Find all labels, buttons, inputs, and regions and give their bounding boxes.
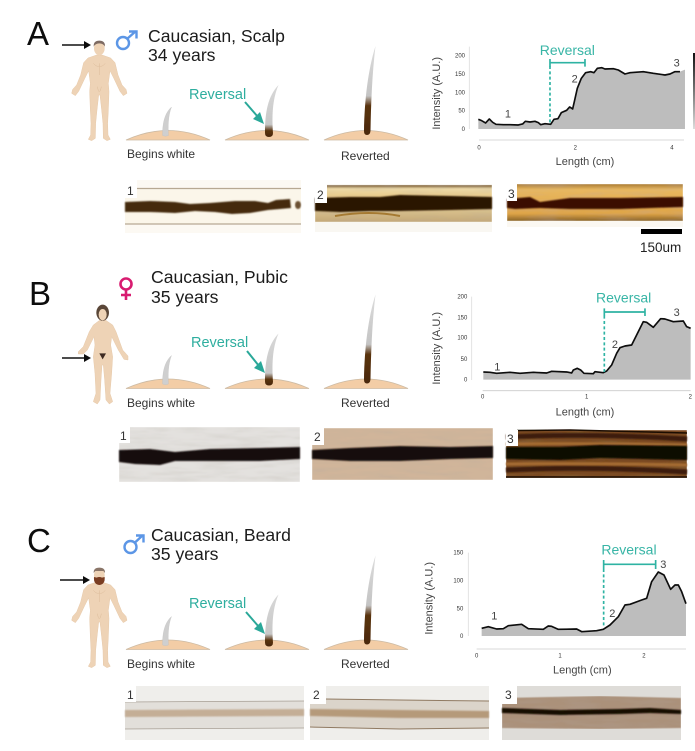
icon: male symbol [117,31,136,49]
label: reverted: Reverted [341,657,390,671]
micrograph A1 [125,180,301,233]
heading: panel letter B: B [29,275,51,312]
arrow: points to beard [60,576,90,584]
chart: intensity profile B: Reversal [596,290,651,306]
micrograph B1: 1 [120,429,127,443]
chart: intensity profile A: 2 [574,146,578,152]
hair stage: reversal [225,85,309,140]
chart: intensity profile B: 100 [457,336,468,342]
label: reversal: Reversal [189,87,246,103]
chart: intensity profile C: 1 [558,654,562,660]
chart: intensity profile B [431,290,693,418]
arrow: reversal point [246,612,265,634]
chart: intensity profile C: 100 [453,579,464,585]
label: begins white: Begins white [127,147,195,161]
panel: C beard [27,522,686,740]
scale bar [640,229,682,255]
chart: intensity profile B: 150 [457,315,468,321]
chart: intensity profile A: 150 [455,72,466,78]
micrograph A2 [315,184,492,232]
chart: intensity profile A [431,42,685,168]
figure: male body with scalp marked [72,41,127,141]
chart: intensity profile B: 1 [494,361,500,373]
chart: intensity profile C [423,542,686,677]
icon: female symbol [120,278,132,300]
icon: male symbol [124,535,144,553]
hair stage: reversal [225,594,309,650]
chart: intensity profile A: 0 [477,146,481,152]
micrograph A1: 1 [127,184,134,198]
chart: intensity profile B: 2 [689,395,693,401]
hair stage: begins white [126,356,210,388]
chart: intensity profile B: 3 [674,307,680,319]
chart: intensity profile A: 50 [458,109,466,115]
text: subject description: Caucasian, Pubic [151,267,288,287]
label: reverted: Reverted [341,396,390,410]
area: intensity curve [483,319,691,380]
text: subject description: Caucasian, Beard [151,525,291,545]
label: reversal: Reversal [191,335,248,351]
heading: panel letter A: A [27,15,49,52]
chart: intensity profile A: 3 [674,57,680,69]
chart: intensity profile C: 0 [460,634,464,640]
area: intensity curve [478,68,685,129]
micrograph A2: 2 [317,188,324,202]
figure: female body with pubic area marked [78,305,128,404]
chart: intensity profile B: 0 [481,395,485,401]
micrograph B2: 2 [314,430,321,444]
chart: intensity profile B: 1 [585,395,589,401]
label: begins white: Begins white [127,396,195,410]
micrograph C1 [125,686,304,740]
text: subject description: Caucasian, Scalp [148,26,285,46]
chart: intensity profile B: 50 [461,357,468,363]
chart: intensity profile B: 2 [612,339,618,351]
micrograph A3: 3 [508,187,515,201]
area: intensity curve [482,572,686,636]
chart: intensity profile A: 4 [670,146,674,152]
scale bar: 150um [640,240,681,255]
chart: intensity profile B: 0 [464,378,468,384]
chart: intensity profile A: 200 [455,53,466,59]
chart: intensity profile B: Intensity (A.U.) [431,312,443,385]
label: reverted: Reverted [341,149,390,163]
arrow: points to pubic area [62,354,91,362]
chart: intensity profile A: Reversal [540,42,595,58]
chart: intensity profile B: 200 [457,295,468,301]
hair stage: begins white [126,107,210,140]
micrograph C1: 1 [127,688,134,702]
micrograph C3 [502,686,681,740]
chart: intensity profile C: Reversal [601,542,657,558]
hair stage: begins white [126,616,210,650]
micrograph C3: 3 [505,688,512,702]
hair stage: reverted [324,556,408,650]
chart: intensity profile C: 2 [609,608,615,620]
chart: intensity profile C: 0 [475,654,479,660]
hair stage: reverted [324,294,408,388]
chart: intensity profile A: 2 [572,74,578,86]
chart: intensity profile C: 2 [642,654,646,660]
chart: intensity profile C: 50 [457,606,464,612]
hair stage: reversal [225,334,309,388]
micrograph B2 [312,428,493,480]
chart: intensity profile A: Length (cm) [556,156,614,168]
chart: intensity profile C: 150 [453,551,464,557]
text: subject description: 34 years [148,45,216,65]
chart: intensity profile B: Length (cm) [556,406,614,418]
arrow: reversal point [247,351,265,373]
chart: intensity profile A: 100 [455,90,466,96]
chart: intensity profile C: 3 [660,559,666,571]
chart: intensity profile C: 1 [491,610,497,622]
chart: intensity profile A: 0 [462,127,466,133]
text: subject description: 35 years [151,544,219,564]
micrograph C2 [310,686,489,740]
arrow: points to scalp [62,41,91,49]
chart: intensity profile A: 1 [505,109,511,121]
label: begins white: Begins white [127,657,195,671]
figure: male body with beard marked [72,568,127,668]
text: subject description: 35 years [151,287,219,307]
micrograph B1 [119,427,300,482]
chart: intensity profile C: Length (cm) [553,665,612,677]
chart: intensity profile C: Intensity (A.U.) [423,562,435,635]
label: reversal: Reversal [189,596,246,612]
heading: panel letter C: C [27,522,51,559]
arrow: reversal point [245,102,264,124]
hair stage: reverted [324,46,408,140]
micrograph B3 [506,430,687,478]
panel: B pubic [29,267,693,482]
colorbar sliver [693,53,695,129]
micrograph A3 [507,184,683,227]
panel: A scalp [27,15,695,255]
chart: intensity profile A: Intensity (A.U.) [431,57,443,130]
micrograph C2: 2 [313,688,320,702]
micrograph B3: 3 [507,432,514,446]
